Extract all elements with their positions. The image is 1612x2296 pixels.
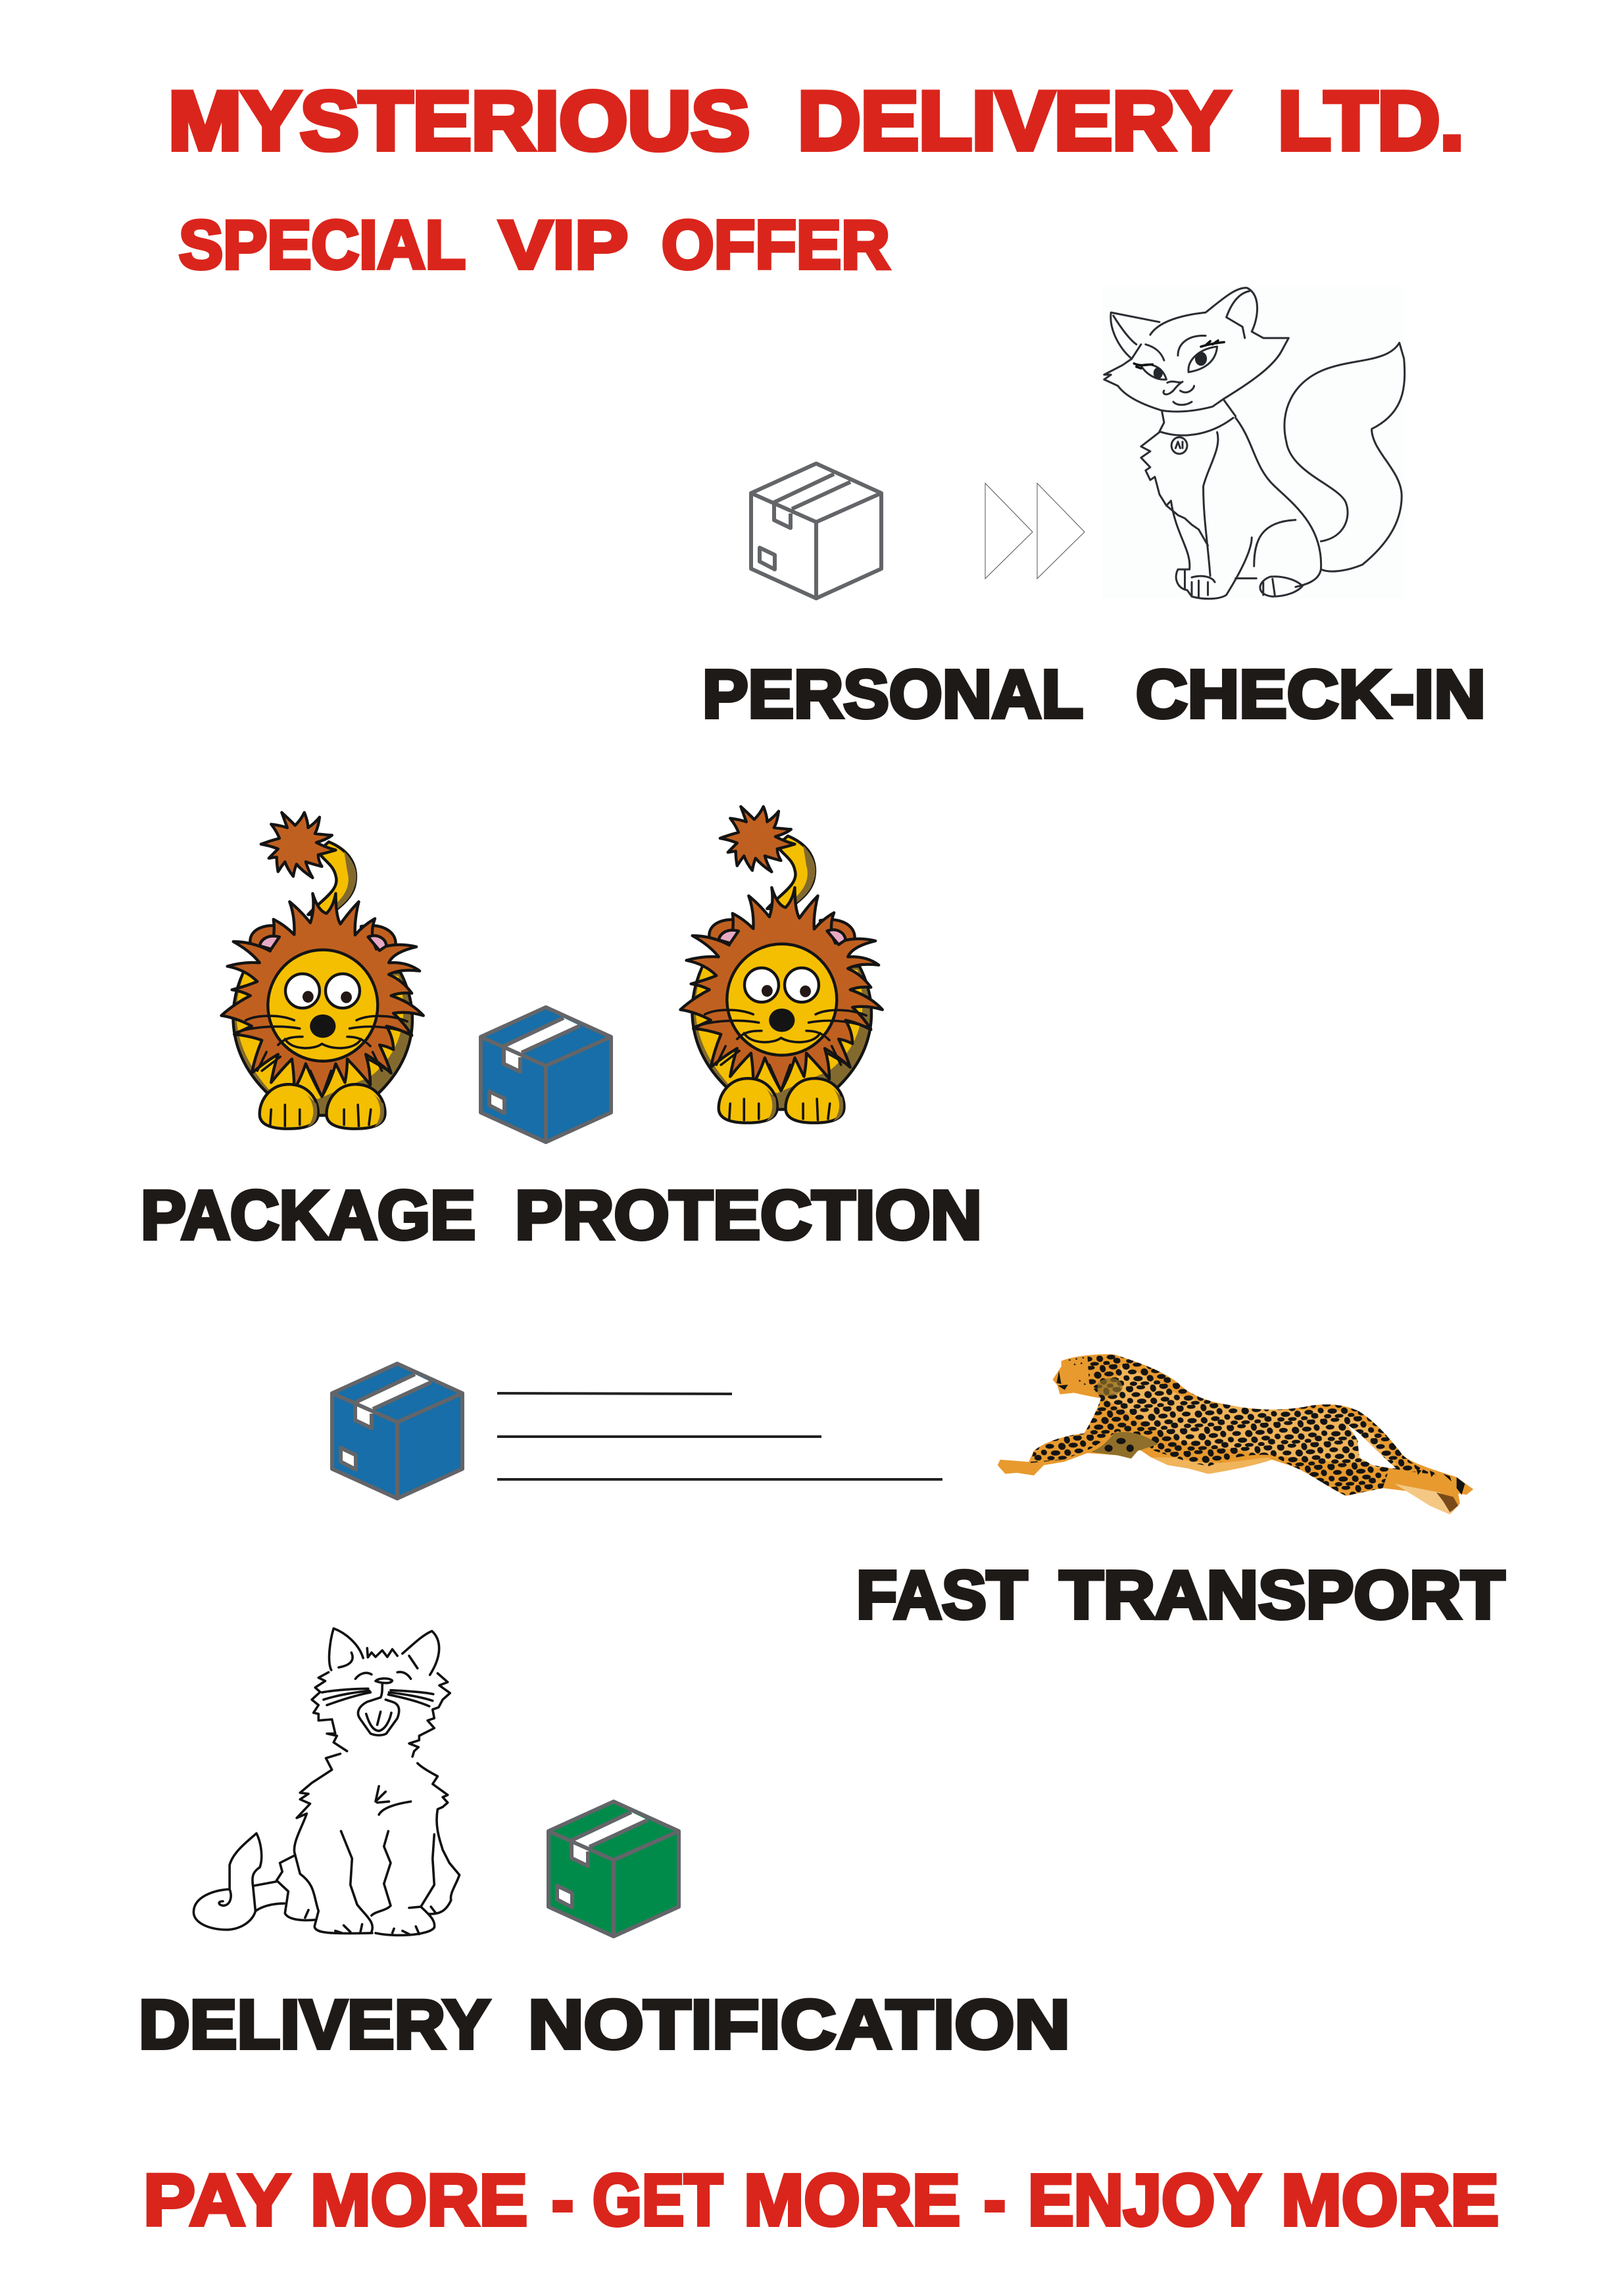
slogan: [143, 2160, 1499, 2241]
illustration: elegant cat: [1102, 287, 1405, 599]
heading: fast transport: [856, 1557, 1505, 1633]
heading: package protection: PACKAGE: [141, 1177, 476, 1254]
icon: green package: [549, 1802, 679, 1936]
slogan: PAY: [143, 2160, 290, 2241]
heading: fast transport: TRANSPORT: [1060, 1557, 1505, 1633]
illustration: right lion: [680, 807, 883, 1123]
subtitle: VIP: [499, 207, 628, 283]
heading: package protection: PROTECTION: [515, 1177, 982, 1254]
illustration: yawning cat: [193, 1629, 460, 1935]
slogan: GET: [593, 2160, 723, 2241]
subtitle: [179, 207, 890, 283]
title: DELIVERY: [798, 74, 1230, 167]
title: MYSTERIOUS: [168, 74, 750, 167]
icon: outlined package: [751, 464, 881, 598]
heading: delivery notification: NOTIFICATION: [528, 1986, 1070, 2063]
title: LTD.: [1278, 74, 1464, 167]
slogan: ENJOY: [1028, 2160, 1261, 2241]
subtitle: SPECIAL: [179, 207, 466, 283]
slogan: MORE: [310, 2160, 527, 2241]
section: fast transport: [332, 1354, 1505, 1633]
heading: personal check-in: PERSONAL: [702, 656, 1083, 732]
speed lines: [497, 1393, 942, 1479]
heading: package protection: [141, 1177, 982, 1254]
section: delivery notification: [139, 1629, 1070, 2063]
subtitle: OFFER: [662, 207, 890, 283]
slogan: MORE: [1281, 2160, 1499, 2241]
heading: personal check-in: CHECK-IN: [1136, 656, 1486, 732]
heading: personal check-in: [702, 656, 1486, 732]
illustration: running cheetah: [998, 1354, 1473, 1514]
icon: blue package: [332, 1364, 462, 1498]
title: [168, 74, 1464, 167]
heading: delivery notification: [139, 1986, 1070, 2063]
slogan: -: [552, 2160, 574, 2241]
illustration: left lion: [221, 813, 424, 1129]
section: package protection: [141, 807, 982, 1254]
section: personal check-in: [702, 287, 1486, 732]
heading: fast transport: FAST: [856, 1557, 1027, 1633]
slogan: -: [984, 2160, 1006, 2241]
icon: double arrow: [985, 483, 1085, 579]
icon: blue package: [481, 1007, 611, 1142]
heading: delivery notification: DELIVERY: [139, 1986, 490, 2063]
slogan: MORE: [744, 2160, 960, 2241]
